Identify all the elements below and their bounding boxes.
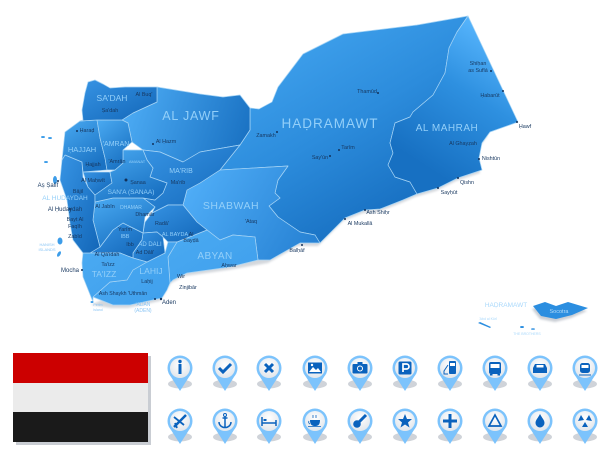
- city labels: as Suflá: [468, 68, 488, 74]
- region: Ad Dali: [133, 232, 165, 262]
- pin: parking: [392, 356, 418, 391]
- region labels: TA'IZZ: [92, 269, 116, 279]
- region: Amran: [97, 120, 132, 170]
- region labels: ABYAN: [197, 251, 233, 262]
- pin: airplane: [168, 408, 192, 444]
- city labels: Ḥajjah: [85, 162, 101, 168]
- city labels: Ash Shaykh 'Uthmān: [99, 291, 147, 297]
- region: Sa'dah: [80, 80, 157, 121]
- pin: camera: [348, 356, 372, 391]
- region labels: SHABWAH: [203, 200, 259, 212]
- city labels: Aḥwar: [221, 263, 237, 269]
- city labels: Qishn: [460, 180, 474, 186]
- city labels: Al Jabīn: [95, 204, 115, 210]
- city labels: Bayḍā: [183, 238, 199, 244]
- flag of Yemen: [13, 353, 148, 442]
- city labels: Ṣa'dah: [102, 108, 118, 114]
- city labels: Balḥāf: [289, 248, 305, 254]
- Socotra labels: [478, 302, 569, 336]
- city labels: Tarīm: [341, 145, 355, 151]
- city labels: Al Ḥazm: [156, 139, 177, 145]
- region labels: AL HUDAYDAH: [42, 195, 88, 202]
- pin: picture: [302, 356, 328, 391]
- region: Dhamar: [93, 198, 155, 247]
- city labels: 'Amrān: [109, 159, 125, 165]
- region: Marib: [143, 145, 240, 213]
- flag shadow: [16, 356, 151, 445]
- region: Al Mahwit: [83, 172, 112, 195]
- city labels: [38, 61, 532, 306]
- city labels: Mocha: [61, 268, 80, 274]
- city labels: Bājil: [73, 189, 83, 195]
- region: Hajjah: [62, 120, 107, 172]
- city labels: Ibb: [126, 242, 134, 248]
- city labels: Aṣ Ṣalīf: [38, 183, 59, 189]
- pin: radiation: [572, 408, 598, 444]
- pin: bed: [256, 408, 282, 444]
- region: Shabwah: [183, 166, 320, 260]
- city labels: Al Ghayẓah: [449, 141, 477, 147]
- city labels: Ad Dāli': [136, 250, 154, 256]
- Socotra island: [533, 302, 588, 319]
- pin: train: [572, 356, 598, 391]
- pin: fuel: [438, 356, 462, 391]
- city labels: Ḥabarūt: [480, 93, 500, 99]
- islands: [41, 136, 94, 303]
- region labels: (ADEN): [134, 308, 152, 314]
- city labels: Shiḥan: [470, 61, 486, 67]
- city labels: Ṣanaa: [130, 180, 146, 186]
- map shadow: [91, 125, 516, 308]
- Socotra labels: 'Abd al Kūrī: [479, 317, 497, 321]
- pin: info: [168, 356, 192, 391]
- region labels: Island: [93, 308, 103, 312]
- region: Sanaa: [95, 150, 167, 202]
- city labels: Ma'rib: [171, 180, 185, 186]
- map of Yemen: [60, 16, 518, 305]
- region labels: MA'RIB: [169, 168, 193, 175]
- region labels: AL JAWF: [162, 109, 220, 123]
- region labels: SA'DAH: [97, 93, 127, 103]
- region: Al Bayda: [143, 205, 207, 242]
- city labels: Ash Shiḥr: [366, 210, 390, 216]
- pin: check: [212, 356, 238, 391]
- region: Lahij: [93, 242, 177, 305]
- region labels: LAHIJ: [139, 266, 163, 276]
- region labels: HANISH: [39, 242, 55, 247]
- city labels: Laḥij: [141, 279, 153, 285]
- pin: cross: [256, 356, 282, 391]
- city labels: Al Ḥudaydah: [48, 207, 82, 213]
- city labels: Yarīm: [118, 227, 132, 233]
- region labels: 'ADAN: [136, 302, 151, 308]
- city labels: Faqīh: [68, 224, 82, 230]
- city labels: Al: [189, 232, 193, 238]
- city labels: Bayt Al: [67, 217, 83, 223]
- region labels: AL MAHRAH: [416, 123, 478, 134]
- region labels: ḤAJJAH: [68, 145, 96, 154]
- city labels: Al Maḥwīt: [81, 178, 105, 184]
- city labels: Zamakh: [256, 133, 276, 139]
- Socotra labels: Socotra: [550, 309, 569, 315]
- city dots: [57, 70, 518, 300]
- city labels: Dhamār: [135, 212, 155, 218]
- region: Taizz: [82, 253, 147, 302]
- region: Ibb: [90, 223, 143, 258]
- pin: cross plus: [438, 408, 462, 444]
- city labels: Radā': [155, 221, 169, 227]
- city labels: Sayḥūt: [441, 190, 458, 196]
- region labels: IBB: [121, 234, 130, 240]
- city labels: Zinjibār: [179, 285, 197, 291]
- city labels: Zabīd: [68, 234, 82, 240]
- region labels: SAN'A (SANAA): [108, 189, 154, 196]
- pin: star: [392, 408, 418, 444]
- city labels: Ta'izz: [101, 262, 115, 268]
- region: Al Mahrah: [388, 16, 518, 194]
- city labels: Al Qā'idah: [95, 252, 119, 258]
- Socotra shadow: [532, 305, 587, 322]
- city labels: Aden: [162, 300, 176, 306]
- city labels: Nishtūn: [482, 156, 500, 162]
- region: Abyan: [168, 230, 258, 283]
- pin: coffee: [302, 408, 328, 444]
- Socotra labels: THE BROTHERS: [513, 332, 541, 336]
- region labels: AD DALI: [138, 242, 162, 248]
- region labels: [38, 93, 478, 314]
- city labels: Say'ūn: [312, 155, 328, 161]
- pin: car: [528, 356, 552, 391]
- region labels: 'AMRAN: [103, 141, 129, 148]
- pin: anchor: [212, 408, 238, 444]
- city labels: Al Buq': [136, 92, 152, 98]
- pin: bus: [482, 356, 508, 391]
- city labels: Ḥawf: [519, 124, 532, 130]
- pin: tent: [482, 408, 508, 444]
- pin: water drop: [528, 408, 552, 444]
- region labels: AMANAT: [129, 159, 146, 164]
- city labels: Ḥaraḍ: [80, 128, 94, 134]
- region labels: Perim: [93, 303, 103, 307]
- region: Al Hudaydah: [60, 155, 100, 253]
- region labels: HAḌRAMAWT: [282, 116, 378, 131]
- region labels: DHAMAR: [120, 205, 142, 211]
- region: Hadramawt: [220, 16, 468, 243]
- pin: key: [348, 408, 372, 444]
- Socotra labels: HAḌRAMAWT: [485, 302, 527, 309]
- city labels: 'Ataq: [245, 219, 257, 225]
- city labels: Al Mukallā: [348, 221, 372, 227]
- region: Al Jawf: [122, 87, 250, 162]
- region labels: ISLANDS: [38, 247, 56, 252]
- city labels: Wir: [177, 274, 185, 280]
- city labels: Thamūd: [357, 89, 377, 95]
- region labels: AL BAYDA: [162, 232, 188, 238]
